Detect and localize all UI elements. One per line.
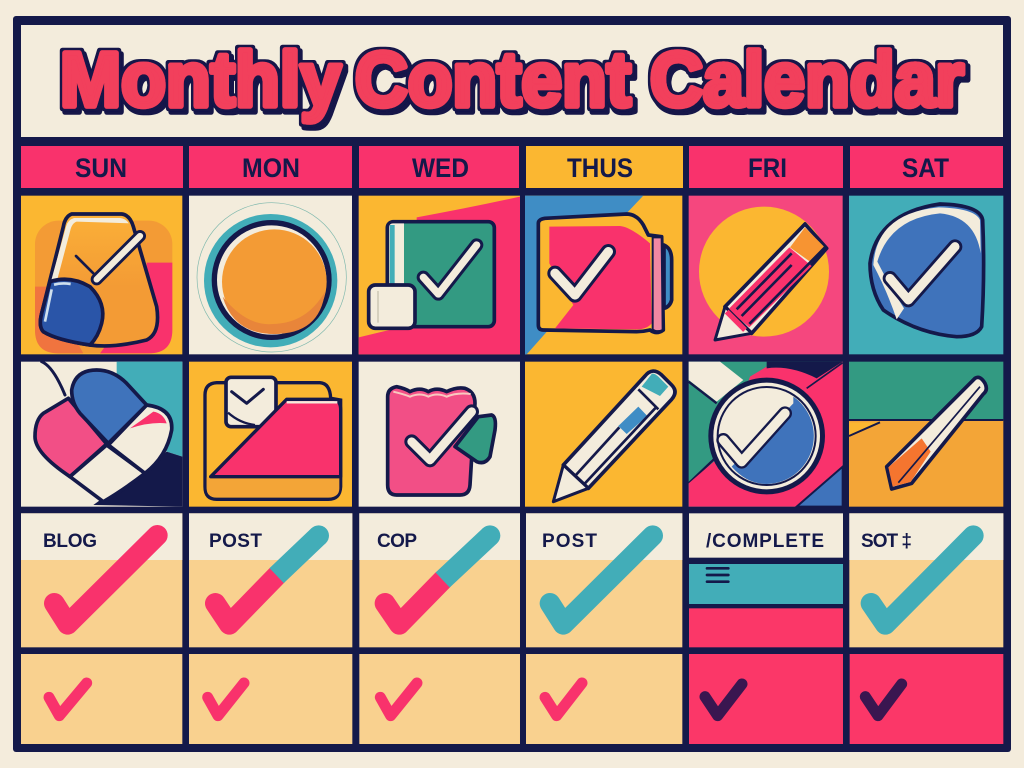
icon: blue shield with check — [849, 196, 1003, 354]
icon: orange bag with check — [21, 196, 182, 354]
icon: torn note with check — [359, 362, 520, 507]
header: MON: MON — [242, 153, 300, 183]
weekday header row — [21, 146, 1003, 188]
icon cells: right half, rows one and two — [525, 196, 1003, 507]
header: THUS: THUS — [567, 153, 633, 183]
icon: blue badge with check — [689, 362, 843, 507]
small check cell 4 — [526, 654, 682, 744]
header: WED — [359, 146, 519, 188]
header: WED: WED — [412, 153, 469, 183]
icon: list lines — [707, 568, 728, 582]
icon: folder with document — [189, 362, 352, 507]
small check cell 6 — [850, 654, 1003, 744]
label: POST: POST — [542, 531, 597, 552]
header: SAT — [850, 146, 1003, 188]
title: Calendar — [650, 37, 964, 123]
icon: marker on green and orange — [849, 362, 1003, 507]
small check cell 5 — [689, 654, 843, 744]
label: POST: POST — [209, 531, 262, 552]
icon: orange circle — [189, 196, 352, 354]
header: SUN: SUN — [75, 153, 127, 183]
header: MON — [189, 146, 352, 188]
cell: COMPLETE — [689, 513, 843, 647]
small check cell 2 — [189, 654, 352, 744]
title: Monthly — [60, 37, 341, 123]
header: FRI: FRI — [748, 153, 787, 183]
small check cell 1 — [21, 654, 182, 744]
icon: pink folder with check — [525, 196, 682, 354]
icon: quartered shield — [21, 362, 182, 507]
cell: SOT teal check — [849, 513, 1003, 647]
icon: white pencil — [525, 362, 682, 507]
cell: POST teal check — [526, 513, 682, 647]
cell: COP — [359, 513, 520, 647]
label: /COMPLETE: /COMPLETE — [706, 531, 824, 552]
title — [60, 37, 964, 123]
icon: green card with check — [359, 196, 520, 354]
header: FRI — [689, 146, 843, 188]
title panel — [21, 25, 1003, 137]
header: SAT: SAT — [902, 153, 949, 183]
status cells: left half — [21, 513, 520, 744]
label: COP: COP — [377, 531, 417, 552]
cell: BLOG — [21, 513, 182, 647]
title: Content — [355, 37, 631, 123]
label: BLOG: BLOG — [43, 531, 97, 552]
small check cell 3 — [359, 654, 520, 744]
header: THUS — [526, 146, 683, 188]
icon cells: left half, rows one and two — [21, 196, 520, 507]
header: SUN — [21, 146, 183, 188]
status cells: right half — [526, 513, 1003, 744]
cell: POST — [189, 513, 352, 647]
icon: pencil on yellow circle — [689, 196, 843, 354]
label: SOT: SOT ‡ — [861, 531, 912, 552]
status labels — [43, 531, 912, 552]
